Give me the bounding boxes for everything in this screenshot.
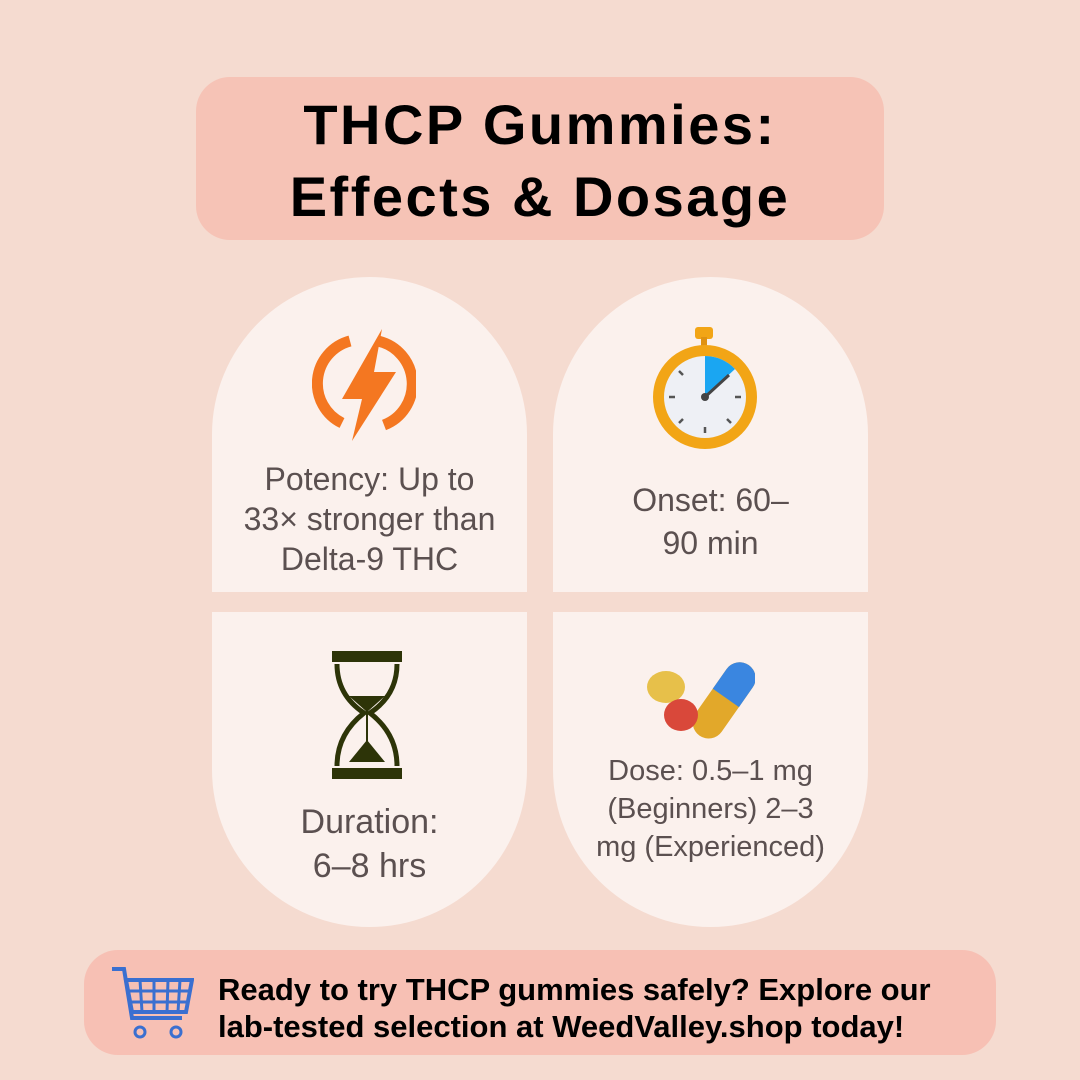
- icon: lightning: [312, 329, 416, 441]
- icon: hourglass: [332, 651, 402, 779]
- text: potency: Potency: Up to: [265, 461, 474, 497]
- text: dose: Dose: 0.5–1 mg: [608, 755, 813, 787]
- panel: potency: [212, 277, 527, 592]
- text: duration: Duration:: [301, 803, 438, 841]
- icon: stopwatch: [653, 327, 757, 449]
- panel: duration: [212, 612, 527, 927]
- text: onset: 90 min: [662, 525, 759, 561]
- icon: pills: [647, 662, 755, 738]
- cta text: [218, 972, 931, 1044]
- text: potency: [244, 461, 495, 577]
- text: dose: (Beginners) 2–3: [607, 793, 814, 825]
- cta text: Ready to try THCP gummies safely? Explore our: [218, 972, 931, 1007]
- cta text: lab-tested selection at WeedValley.shop today!: [218, 1009, 904, 1044]
- text: duration: 6–8 hrs: [313, 847, 426, 885]
- panel: dose: [553, 612, 868, 927]
- title pill: THCP Gummies:: [303, 93, 777, 156]
- text: potency: Delta-9 THC: [281, 541, 458, 577]
- text: duration: [301, 803, 438, 885]
- title pill: Effects & Dosage: [290, 165, 790, 228]
- text: dose: mg (Experienced): [596, 831, 825, 863]
- icon: cart: [112, 967, 194, 1038]
- text: onset: Onset: 60–: [632, 482, 789, 518]
- text: potency: 33× stronger than: [244, 501, 495, 537]
- cta pill: [84, 950, 996, 1055]
- panel: onset: [553, 277, 868, 592]
- title pill: [196, 77, 884, 240]
- text: dose: [596, 755, 825, 863]
- text: onset: [632, 482, 789, 561]
